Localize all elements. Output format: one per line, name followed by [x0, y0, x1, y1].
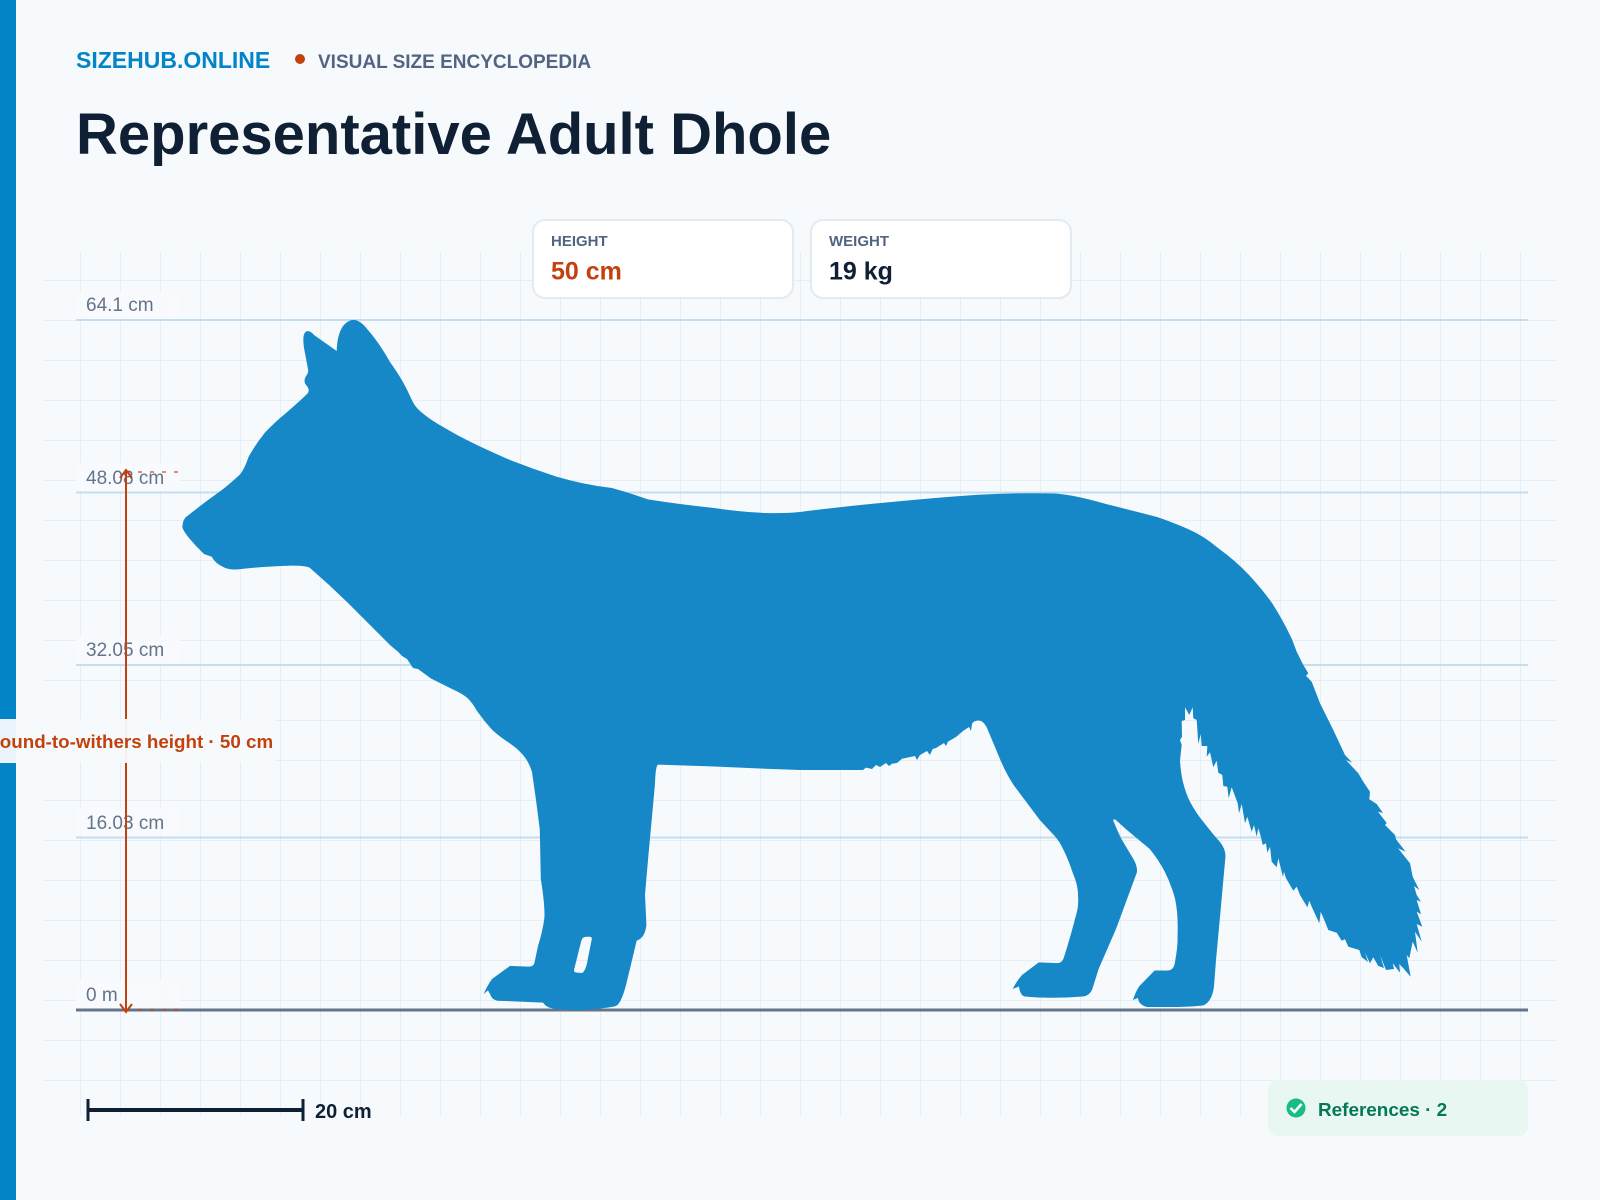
reference line 16.03 cm — [76, 808, 1528, 838]
reference line 64.1 cm: 64.1 cm — [86, 295, 154, 316]
reference line 32.05 cm: 32.05 cm — [86, 640, 164, 661]
icon: check circle — [1286, 1098, 1306, 1118]
reference line 48.08 cm: 48.08 cm — [86, 468, 164, 489]
references badge — [1268, 1080, 1528, 1136]
ground line 0 m: 0 m — [86, 985, 118, 1006]
left accent bar — [0, 0, 16, 1200]
height stat card: 50 cm — [551, 258, 622, 286]
height stat card: HEIGHT — [551, 233, 608, 250]
brand name: SIZEHUB.ONLINE — [76, 47, 270, 73]
reference line 64.1 cm — [76, 290, 1528, 320]
ground line 0 m — [76, 980, 1528, 1010]
height dimension arrow — [120, 470, 180, 1012]
weight stat card: 19 kg — [829, 258, 893, 286]
tagline: VISUAL SIZE ENCYCLOPEDIA — [318, 52, 591, 73]
scale bar 20 cm — [88, 1099, 372, 1123]
dhole silhouette — [182, 320, 1422, 1010]
references badge: References · 2 — [1318, 1100, 1447, 1121]
scale bar 20 cm: 20 cm — [315, 1101, 372, 1123]
reference line 16.03 cm: 16.03 cm — [86, 813, 164, 834]
weight stat card: WEIGHT — [829, 233, 889, 250]
title: Representative Adult Dhole — [76, 102, 831, 167]
brand separator dot — [295, 54, 305, 64]
height stat card — [533, 220, 793, 298]
weight stat card — [811, 220, 1071, 298]
reference line 48.08 cm — [76, 463, 1528, 492]
reference line 32.05 cm — [76, 635, 1528, 665]
height callout label — [0, 719, 275, 763]
